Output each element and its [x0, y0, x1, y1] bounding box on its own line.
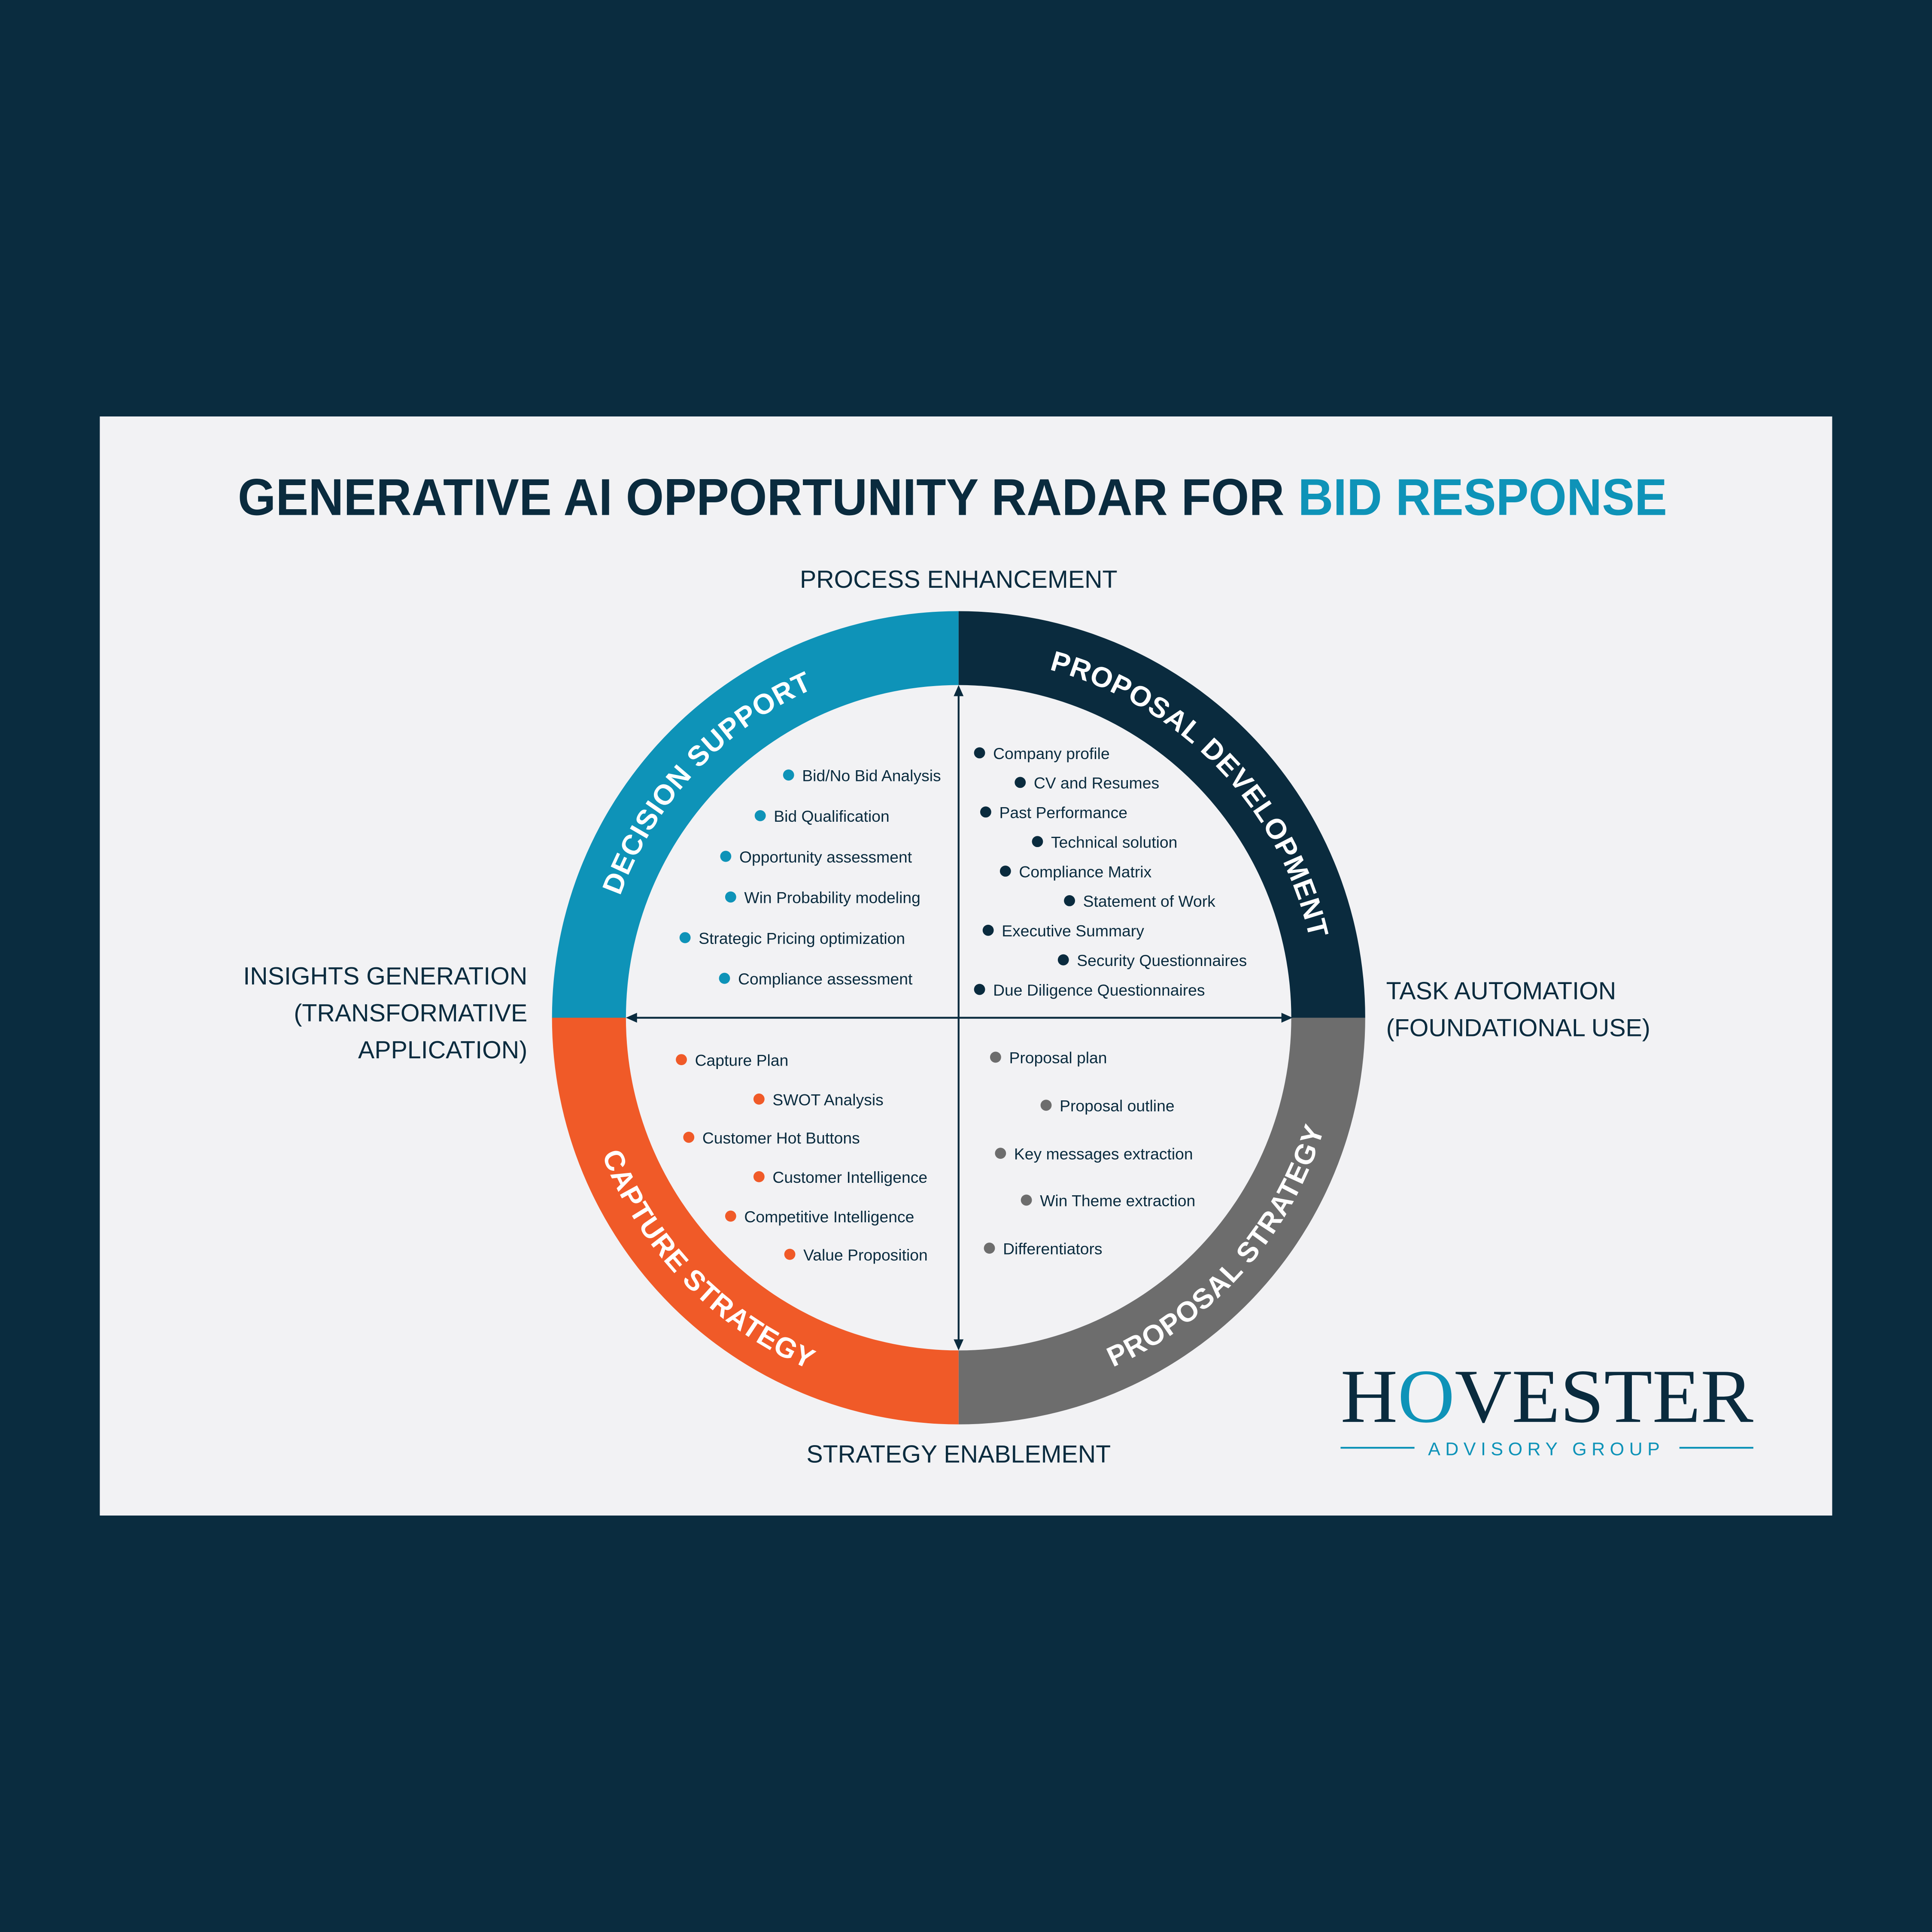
axis label: right	[1386, 977, 1650, 1042]
list: decision support items	[680, 767, 941, 988]
list: proposal strategy items	[984, 1049, 1195, 1258]
ring label: capture strategy: CAPTURE STRATEGY	[596, 1145, 820, 1375]
list: proposal development items: Due Diligence Questionnaires	[993, 981, 1205, 999]
list: proposal development items	[974, 744, 1247, 999]
axis label: left	[243, 963, 527, 1064]
list: capture strategy items: Capture Plan	[695, 1051, 788, 1069]
list: proposal development items: Technical solution	[1051, 833, 1177, 851]
list: proposal strategy items: Proposal plan	[1009, 1049, 1107, 1067]
list: proposal strategy items: Key messages extraction	[1014, 1145, 1193, 1163]
list: decision support items: Bid Qualification	[774, 807, 890, 825]
axis label: left: APPLICATION)	[358, 1036, 527, 1064]
list: proposal development items: Security Questionnaires	[1077, 951, 1247, 969]
list: capture strategy items: Customer Intelligence	[772, 1168, 927, 1186]
logo: hovester advisory group: ADVISORY GROUP	[1428, 1439, 1665, 1459]
list: decision support items: Compliance assessment	[738, 970, 913, 988]
list: proposal strategy items: Proposal outline	[1060, 1097, 1175, 1115]
ring label: proposal strategy: PROPOSAL STRATEGY	[1102, 1120, 1330, 1373]
list: capture strategy items: Competitive Intelligence	[744, 1208, 914, 1226]
list: proposal development items: Statement of Work	[1083, 892, 1215, 910]
list: capture strategy items	[676, 1051, 928, 1264]
list: decision support items: Win Probability modeling	[744, 889, 920, 907]
logo: hovester advisory group: HOVESTER	[1340, 1354, 1753, 1439]
radar ring	[552, 611, 1365, 1425]
list: decision support items: Strategic Pricing optimization	[699, 929, 905, 947]
ring label: proposal development: PROPOSAL DEVELOPMENT	[1048, 645, 1335, 941]
list: proposal strategy items: Differentiators	[1003, 1240, 1103, 1258]
axis label: right: TASK AUTOMATION	[1386, 977, 1616, 1005]
list: proposal development items: CV and Resumes	[1034, 774, 1159, 792]
list: capture strategy items: SWOT Analysis	[772, 1091, 884, 1109]
list: decision support items: Bid/No Bid Analysis	[802, 767, 941, 785]
title: GENERATIVE AI OPPORTUNITY RADAR FOR BID RESPONSE	[238, 468, 1667, 526]
panel: main card	[100, 416, 1832, 1516]
axis label: bottom: STRATEGY ENABLEMENT	[806, 1441, 1111, 1468]
axis label: left: INSIGHTS GENERATION	[243, 963, 527, 990]
list: proposal development items: Executive Summary	[1002, 922, 1144, 940]
axis label: left: (TRANSFORMATIVE	[294, 999, 527, 1027]
list: capture strategy items: Customer Hot Buttons	[702, 1129, 860, 1147]
list: proposal development items: Compliance Matrix	[1019, 863, 1152, 881]
list: decision support items: Opportunity assessment	[739, 848, 912, 866]
list: proposal development items: Past Performance	[999, 804, 1127, 822]
list: capture strategy items: Value Proposition	[803, 1246, 928, 1264]
axis label: right: (FOUNDATIONAL USE)	[1386, 1015, 1650, 1042]
list: proposal development items: Company profile	[993, 744, 1110, 762]
ring label: decision support: DECISION SUPPORT	[596, 665, 816, 898]
arrows: axes	[626, 685, 1293, 1350]
list: proposal strategy items: Win Theme extraction	[1040, 1192, 1195, 1210]
axis label: top: PROCESS ENHANCEMENT	[800, 566, 1118, 593]
